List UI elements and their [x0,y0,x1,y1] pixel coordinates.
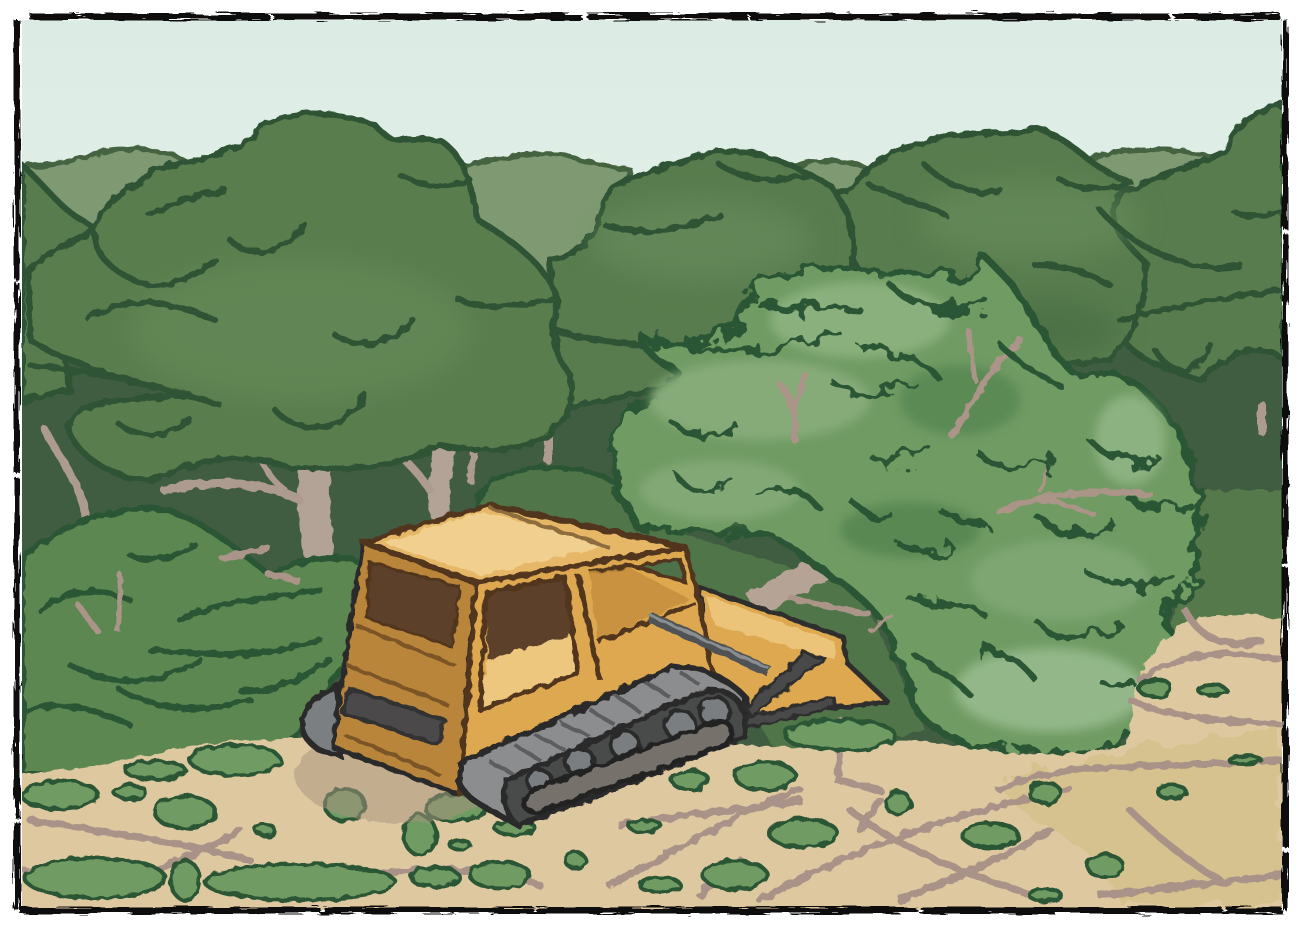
side face [460,547,712,795]
tree trunks and branches [45,405,1262,548]
branches on ground [25,610,1282,900]
middle bushes behind bulldozer [475,468,925,760]
ground [16,614,1290,918]
ground patch [1000,725,1282,905]
canopy: far left tree [22,165,110,400]
hydraulic bar [650,615,770,672]
side window [486,577,575,660]
rear face [333,542,476,795]
rear shading lines [345,625,455,775]
side opening [590,560,685,582]
lower door panel [480,633,578,710]
fallen tree branches [780,330,1150,630]
fallen tree trunk [752,560,835,605]
push arms [745,653,837,728]
bulldozer shadow [295,727,505,823]
rear track [303,687,340,755]
track wheels [528,697,730,794]
fallen tree [612,262,1198,755]
bulldozer [295,505,888,825]
sky [20,20,1282,220]
roof [363,505,685,583]
fallen tree squiggles [660,285,1190,690]
far right lower foliage [1170,490,1284,640]
pale distant trees [28,149,1220,290]
cab and body [333,505,712,795]
scattered leaves [22,679,1261,901]
door post [578,575,600,680]
fallen tree crown [612,262,1198,755]
canopy: big left tree [28,113,572,480]
main track [460,667,745,825]
rear window [367,562,460,647]
fallen tree highlights and shadows [640,282,1165,732]
canopy: right tree [550,103,1284,410]
blade [699,587,888,717]
forest understory [20,300,1284,800]
track inner bar [524,721,732,812]
rear grille [343,688,444,745]
canopy outlines [30,165,1280,435]
canopy shading [130,180,1140,400]
left foreground bush [22,508,365,775]
